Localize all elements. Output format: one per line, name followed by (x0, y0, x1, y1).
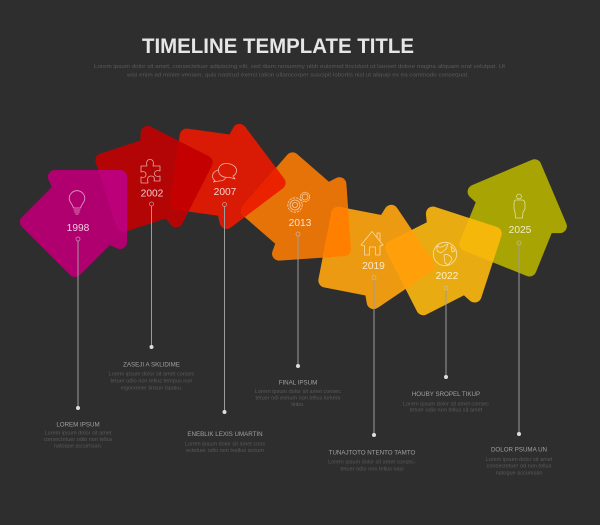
label: 2022: HOUBY SROPEL TIKUP (412, 391, 480, 398)
house: 2019 (323, 202, 436, 311)
label: 2019: Lorem ipsum dolor sit amet consec- (328, 460, 416, 466)
pin: 2007 (222, 202, 226, 414)
label: 2007: ENEBLIK LEXIS UMARTIN (187, 431, 263, 438)
pin: 1998 (76, 237, 80, 410)
house: 2022 (387, 193, 516, 319)
label: 2002 (108, 361, 195, 391)
house: 2007 (176, 124, 285, 228)
label: 1998: consectetuer odio non tellus (43, 437, 113, 443)
label: 2007 (185, 431, 265, 454)
year 2002: 2002 (141, 188, 164, 200)
year 2007: 2007 (214, 187, 237, 198)
label: 2013 (255, 379, 341, 408)
label: 2025: natogue accumsan (496, 470, 542, 476)
pin: 2002 (150, 202, 154, 349)
year 1998: 1998 (67, 223, 90, 234)
year 2019: 2019 (362, 261, 385, 272)
label: 2025: Lorem ipsum dolor sit amet (486, 457, 553, 463)
label: 1998: Lorem ipsum dolor sit amet (45, 430, 112, 436)
icon: house (361, 232, 383, 255)
house: 2002 (99, 119, 220, 236)
label: 1998: natoque accumsan. (54, 444, 103, 450)
label: 2025: consectetuer od non tellus (487, 464, 552, 470)
house: 1998 (18, 144, 153, 279)
label: 2019: tetuer odio non tellus nasi (340, 467, 404, 473)
overlap tints (98, 141, 502, 289)
pin: 2022 (444, 286, 448, 379)
year 2013: 2013 (289, 218, 312, 229)
pin: 2019 (372, 276, 376, 437)
icon: light bulb (69, 191, 85, 214)
label: 2022: tetuer odio non tellus sit amet (410, 408, 483, 414)
icon: gears (288, 192, 310, 212)
label: 1998: LOREM IPSUM (56, 421, 100, 428)
intro text: Lorem ipsum dolor sit amet, consectetuer adipiscing elit, sed diam nonummy nibh euismod tincidunt ut laoreet dolore magna aliquam erat volutpat. Ut (94, 64, 506, 70)
icon: globe (433, 242, 457, 266)
label: 1998 (43, 421, 113, 450)
intro text: wisi enim ad minim veniam, quis nostrud exerci tation ullamcorper suscipit lobortis nisl ut aliquip ex ea commodo consequat. (126, 72, 470, 78)
year 2022: 2022 (436, 271, 459, 282)
label: 2002: ZASEJI A SKLIDIME (123, 361, 180, 368)
label: 2019 (328, 449, 416, 473)
intro text (94, 64, 506, 78)
label: 2002: Lorem ipsum dolor sit amet consec (108, 372, 195, 378)
label: 2013: linbo. (291, 402, 305, 408)
house: 2025 (455, 149, 577, 274)
label: 2002: eigonomer tinsun ispaku. (121, 385, 183, 391)
label: 2025 (486, 447, 553, 476)
label: 2007: Lorem ipsum dolor sit amet cons (185, 441, 265, 447)
icon: speech bubbles (212, 164, 236, 182)
label: 2022: Lorem ipsum dolor sit amet consec (403, 401, 489, 407)
label: 2002: tetuer odio non tellus tempus non (110, 378, 193, 384)
icon: person (514, 194, 525, 218)
year 2025: 2025 (509, 225, 532, 236)
house: 2013 (240, 150, 374, 284)
label: 2022 (403, 391, 489, 414)
pin: 2025 (517, 241, 521, 436)
label: 2013: tetuer odi eonum non tellus lorkem (255, 396, 341, 402)
label: 2013: Lorem ipsum dolor sit amet consec (255, 389, 341, 395)
pin: 2013 (296, 232, 300, 368)
label: 2013: FINAL IPSUM (279, 379, 317, 386)
title: TIMELINE TEMPLATE TITLE (142, 35, 414, 58)
label: 2019: TUNAJTOTO NTENTO TAMTO (329, 449, 415, 456)
icon: puzzle piece (141, 160, 160, 183)
label: 2025: DOLOR PSUMA UN (491, 447, 547, 454)
label: 2007: ectetuer odio non tvellus accum (186, 448, 264, 454)
